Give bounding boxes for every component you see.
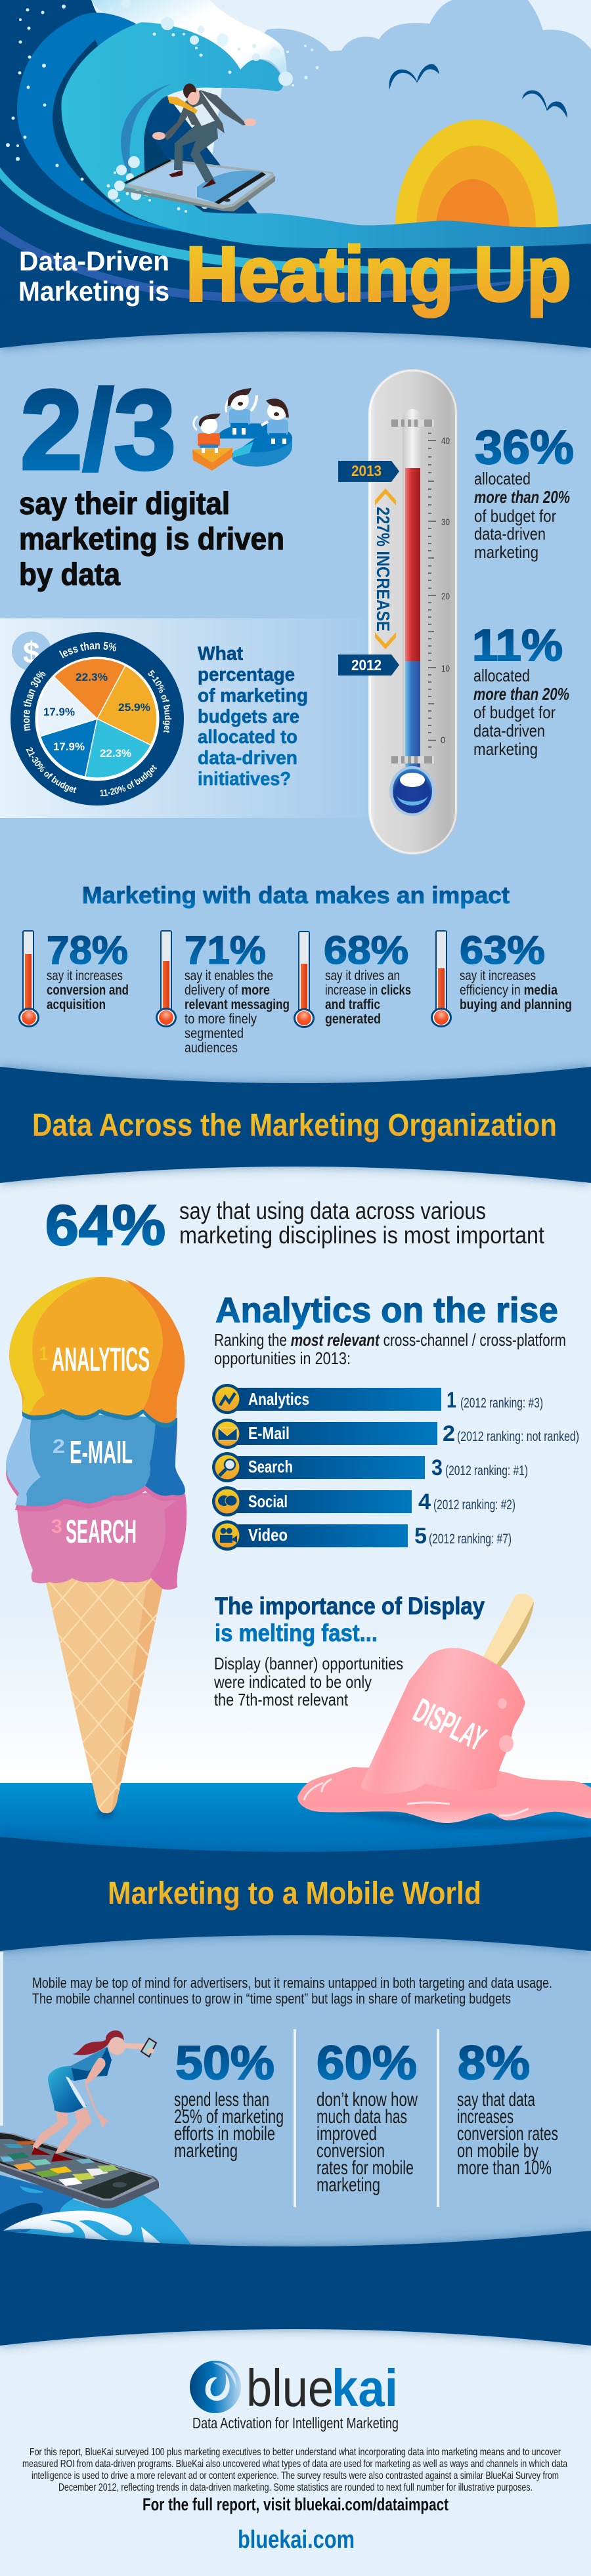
rank row: search: 3 xyxy=(431,1455,443,1480)
rank row: social: 4 xyxy=(418,1490,431,1514)
impact stat 68% xyxy=(324,928,411,1027)
mini thermometer 68% xyxy=(294,931,315,1028)
heading: marketing with data: Marketing with data makes an impact xyxy=(82,882,510,909)
impact stat 71%: relevant messaging xyxy=(185,997,290,1012)
scoop: search xyxy=(17,1490,186,1590)
statement: say their digital marketing: marketing is driven xyxy=(19,521,284,556)
icon: seagulls xyxy=(389,64,567,118)
blouse xyxy=(71,2047,112,2081)
ring labels: 5-10% of budget xyxy=(148,670,172,733)
impact stat 71%: delivery of more xyxy=(185,983,270,998)
divider xyxy=(437,2029,439,2207)
impact stat 63% xyxy=(460,928,572,1012)
divider xyxy=(294,2029,296,2207)
impact stat 71%: say it enables the xyxy=(185,968,273,983)
rank row: search xyxy=(212,1452,528,1482)
handset xyxy=(141,2038,156,2057)
mercury red xyxy=(405,468,420,661)
stat 50%: spend less than xyxy=(174,2089,269,2111)
logo wordmark: kai: kai xyxy=(332,2359,398,2417)
surfer businessman xyxy=(152,83,256,188)
teal swoosh across navy xyxy=(0,167,565,274)
rank row: video: Video xyxy=(248,1525,288,1545)
stat 11% xyxy=(472,620,569,759)
mobile wave xyxy=(0,2175,194,2248)
stat 36%: of budget for xyxy=(474,506,556,526)
impact stat 68%: increase in clicks xyxy=(325,983,411,998)
mobile intro text xyxy=(32,1975,552,2007)
title line: Data-Driven: Data-Driven xyxy=(19,246,169,276)
arrow tag 2012 xyxy=(338,655,399,676)
impact stat 71%: 71% xyxy=(185,928,266,972)
foam crest xyxy=(91,0,287,82)
home area xyxy=(81,2172,152,2199)
scale labels: 10 xyxy=(441,663,450,674)
impact stat 68%: 68% xyxy=(324,928,408,972)
dress stripe xyxy=(66,2076,87,2107)
section background: intro xyxy=(0,328,591,1090)
sky background xyxy=(0,0,591,354)
call to action: For the full report, visit bluekai.com/dataimpact xyxy=(142,2495,449,2514)
stick xyxy=(483,1594,534,1666)
foam bubbles xyxy=(6,0,319,319)
stat 64%: say that using data across various xyxy=(179,1197,486,1224)
chevron up xyxy=(375,488,396,505)
stat 64% xyxy=(45,1194,545,1257)
stat 11%: 11% xyxy=(472,620,563,670)
sun xyxy=(395,119,558,333)
legs xyxy=(33,2110,68,2153)
impact stat 78%: conversion and xyxy=(47,983,129,998)
mercury blue xyxy=(405,661,420,773)
ranking intro text xyxy=(214,1330,566,1368)
scoop: e-mail xyxy=(6,1411,185,1506)
hair xyxy=(72,2030,124,2055)
wave teal body xyxy=(61,22,591,248)
scoop shadow on pink xyxy=(6,1417,185,1511)
app screen xyxy=(0,2139,131,2191)
statement: say their digital marketing: say their digital xyxy=(19,486,230,521)
stat 8%: say that data xyxy=(457,2089,535,2111)
website: bluekai.com xyxy=(238,2526,355,2554)
display text: Display (banner) opportunities xyxy=(214,1654,403,1673)
scale ticks xyxy=(428,433,436,747)
scale labels: 40 xyxy=(441,435,450,446)
stat 11%: data-driven xyxy=(473,721,545,741)
heading: analytics on the rise: Analytics on the rise xyxy=(215,1291,558,1330)
blue table surface xyxy=(0,1783,591,1862)
slice values xyxy=(43,671,150,760)
stat 11%: of budget for xyxy=(473,702,556,722)
227% increase label: 227% INCREASE xyxy=(373,507,393,632)
person left xyxy=(194,414,221,453)
ring labels: 11-20% of budget xyxy=(100,765,157,796)
rank row: e-mail xyxy=(212,1419,579,1449)
search label: SEARCH xyxy=(66,1513,137,1550)
stat 36%: allocated xyxy=(474,469,531,488)
navy band: bottom xyxy=(0,2231,591,2346)
glass tube xyxy=(403,409,422,770)
rank row: search: Search xyxy=(248,1457,293,1476)
impact stat 78%: say it increases xyxy=(47,968,123,983)
stat 60% xyxy=(317,2037,418,2196)
rank row: search: (2012 ranking: #1) xyxy=(445,1463,528,1478)
rank row: analytics: (2012 ranking: #3) xyxy=(460,1396,543,1411)
logo swirl xyxy=(190,2361,241,2413)
stat 60%: marketing xyxy=(317,2174,380,2196)
icon: dollar coin xyxy=(12,632,51,671)
impact stat 63%: buying and planning xyxy=(460,997,572,1012)
scoop: analytics xyxy=(9,1277,185,1423)
scale labels: 30 xyxy=(441,517,450,527)
heading: marketing to a mobile world: Marketing to a Mobile World xyxy=(108,1876,481,1911)
slice values: 22.3% xyxy=(100,747,131,760)
stat 60%: don’t know how xyxy=(317,2089,418,2111)
cone shadow xyxy=(97,1809,115,1818)
ring labels xyxy=(24,642,172,796)
display text: were indicated to be only xyxy=(213,1672,372,1692)
stat 8%: increases xyxy=(457,2106,514,2128)
mini thermometer 71% xyxy=(156,930,177,1027)
slice: more than 30% xyxy=(37,677,97,737)
melted popsicle xyxy=(297,1594,591,1828)
impact stat 68%: generated xyxy=(325,1012,381,1027)
2/3 statistic: 2/3 xyxy=(20,367,176,493)
stat 8% xyxy=(457,2037,558,2179)
stat 50%: 25% of marketing xyxy=(174,2106,284,2128)
impact stat 68%: say it drives an xyxy=(325,968,400,983)
logo: bluekai xyxy=(190,2359,398,2417)
section background: mobile xyxy=(0,1923,591,2252)
wave blue layer xyxy=(17,12,213,234)
number 1: 1 xyxy=(39,1343,48,1365)
stat 11%: allocated xyxy=(473,666,530,685)
wave inner swoosh xyxy=(121,84,171,181)
impact stat 78%: acquisition xyxy=(47,997,106,1012)
impact stat 71%: audiences xyxy=(185,1041,238,1056)
rank row: social xyxy=(212,1486,515,1516)
slice: 5-10% xyxy=(97,666,157,745)
large thermometer xyxy=(368,369,458,855)
ice cream cone xyxy=(6,1277,186,1818)
rank row: e-mail: E-Mail xyxy=(248,1423,290,1443)
slice: 11-20% xyxy=(85,719,151,778)
stat 60%: much data has xyxy=(317,2106,407,2128)
stat 36% xyxy=(474,421,574,562)
cloud xyxy=(197,0,591,263)
stat 60%: conversion xyxy=(317,2140,385,2162)
person centre xyxy=(226,388,257,435)
app icons xyxy=(0,2141,127,2187)
dress xyxy=(48,2066,87,2113)
mini thermometer 78% xyxy=(18,930,39,1027)
rank row: video xyxy=(212,1520,512,1551)
impact stat 63%: 63% xyxy=(460,928,545,972)
stat 50%: 50% xyxy=(175,2037,274,2090)
cone xyxy=(45,1577,165,1813)
display text xyxy=(213,1654,403,1709)
title line: Marketing is: Marketing is xyxy=(18,276,169,307)
stat 36%: 36% xyxy=(475,421,574,474)
rank row: social: Social xyxy=(248,1492,288,1511)
e-mail label: E-MAIL xyxy=(70,1435,133,1470)
rank row: analytics: Analytics xyxy=(248,1389,309,1409)
rank row: video: (2012 ranking: #7) xyxy=(429,1532,512,1547)
stat 60%: 60% xyxy=(317,2037,417,2090)
arm xyxy=(85,2058,110,2128)
rank row: analytics: 1 xyxy=(447,1388,456,1413)
arrow tag 2013 xyxy=(338,461,399,482)
heading: importance of display: The importance of Display xyxy=(215,1593,485,1620)
popsicle body xyxy=(361,1648,525,1794)
impact stat 63%: efficiency in media xyxy=(460,983,558,998)
impact stat 71%: segmented xyxy=(185,1026,244,1041)
title xyxy=(18,231,571,318)
chevron down xyxy=(375,632,396,649)
popsicle label: DISPLAY xyxy=(408,1692,492,1759)
shoes xyxy=(32,2147,74,2162)
ring labels: more than 30% xyxy=(24,671,46,731)
scoop shadow on blue xyxy=(22,1409,177,1428)
stat 60%: improved xyxy=(317,2123,377,2145)
dark blue swoosh across navy xyxy=(0,226,565,302)
stat 60%: rates for mobile xyxy=(317,2157,414,2179)
question text: initiatives? xyxy=(198,769,291,790)
stat 50%: marketing xyxy=(174,2140,238,2162)
bulb xyxy=(389,766,435,816)
slice: less than 5% xyxy=(54,658,125,719)
scale labels: 0 xyxy=(441,735,445,745)
impact stat 78%: 78% xyxy=(47,928,128,972)
slice values: 17.9% xyxy=(53,741,85,753)
statement: say their digital marketing: by data xyxy=(19,557,121,591)
impact stat 78% xyxy=(47,928,129,1012)
header navy curve xyxy=(0,309,591,348)
question text: What xyxy=(198,643,243,664)
phone surfboard xyxy=(124,160,275,211)
rank row: social: (2012 ranking: #2) xyxy=(433,1497,515,1513)
head xyxy=(108,2038,125,2055)
navy band: marketing to a mobile world xyxy=(0,1837,591,1951)
ranking intro text: opportunities in 2013: xyxy=(214,1348,351,1368)
title: Heating Up: Heating Up xyxy=(186,231,571,318)
statement: say their digital marketing xyxy=(19,486,284,591)
logo wordmark: blue: blue xyxy=(246,2359,334,2417)
stat 64%: 64% xyxy=(45,1194,165,1257)
people on pie chart icon xyxy=(192,388,292,471)
question text: budgets are xyxy=(198,706,299,727)
stat 11%: marketing xyxy=(473,739,538,759)
stat 8%: on mobile by xyxy=(457,2140,538,2162)
tagline: Data Activation for Intelligent Marketing xyxy=(192,2415,399,2432)
number 2: 2 xyxy=(53,1436,65,1457)
slice values: 17.9% xyxy=(43,706,75,718)
icon: dollar coin: $ xyxy=(23,635,40,670)
question text: of marketing xyxy=(198,685,308,706)
panel: budget question xyxy=(0,618,374,818)
scale labels: 20 xyxy=(441,591,450,601)
pie chart: budget allocation xyxy=(11,632,184,805)
slice values: 22.3% xyxy=(76,671,108,683)
left edge strip xyxy=(0,1952,3,2126)
slice values: 25.9% xyxy=(118,701,150,714)
melt drips xyxy=(498,1698,514,1752)
arrow tag 2012: 2012 xyxy=(351,656,382,674)
wave back layer navy xyxy=(0,0,591,348)
puddle xyxy=(297,1767,591,1823)
heading: importance of display xyxy=(215,1593,485,1646)
wave dark inner edge xyxy=(53,39,211,234)
impact stat 63%: say it increases xyxy=(460,968,536,983)
stat 8%: more than 10% xyxy=(457,2157,552,2179)
stat 50%: efforts in mobile xyxy=(174,2123,275,2145)
puddle highlights xyxy=(304,1779,529,1816)
rank row: e-mail: 2 xyxy=(443,1421,455,1446)
stat 36%: marketing xyxy=(474,542,538,562)
display text: the 7th-most relevant xyxy=(214,1690,349,1709)
navy band: data across xyxy=(0,1067,591,1183)
rank row: analytics xyxy=(212,1384,543,1414)
analytics label: ANALYTICS xyxy=(52,1341,150,1378)
stat 64%: marketing disciplines is most important xyxy=(179,1222,545,1249)
scale labels xyxy=(441,435,450,745)
impact stat 71%: to more finely xyxy=(185,1012,257,1027)
stat 50% xyxy=(174,2037,284,2162)
puddle shadow xyxy=(302,1809,591,1828)
question text xyxy=(198,643,308,790)
ring labels: less than 5% xyxy=(59,642,116,658)
ring labels: 21-30% of budget xyxy=(26,747,76,793)
clips xyxy=(390,419,434,763)
woman on phone xyxy=(32,2030,156,2162)
question text: allocated to xyxy=(198,727,297,748)
arrow tag 2013: 2013 xyxy=(351,462,382,479)
question text: data-driven xyxy=(198,748,297,769)
number 3: 3 xyxy=(51,1516,62,1537)
person right xyxy=(261,398,289,444)
methodology paragraph xyxy=(22,2447,567,2493)
smartphone xyxy=(0,2132,159,2208)
question text: percentage xyxy=(198,664,295,685)
stat 36%: data-driven xyxy=(474,524,546,544)
slice: 21-30% xyxy=(40,719,97,777)
impact stat 68%: and traffic xyxy=(325,997,380,1012)
impact stat 71% xyxy=(185,928,290,1056)
raised arm xyxy=(123,2043,146,2050)
stat 8%: 8% xyxy=(458,2037,530,2090)
heading: importance of display: is melting fast... xyxy=(215,1620,378,1646)
rank row: video: 5 xyxy=(414,1524,427,1549)
section background: organization xyxy=(0,1155,591,1784)
footer background xyxy=(0,2317,591,2576)
hand xyxy=(146,2048,154,2053)
mini thermometer 63% xyxy=(431,930,452,1027)
